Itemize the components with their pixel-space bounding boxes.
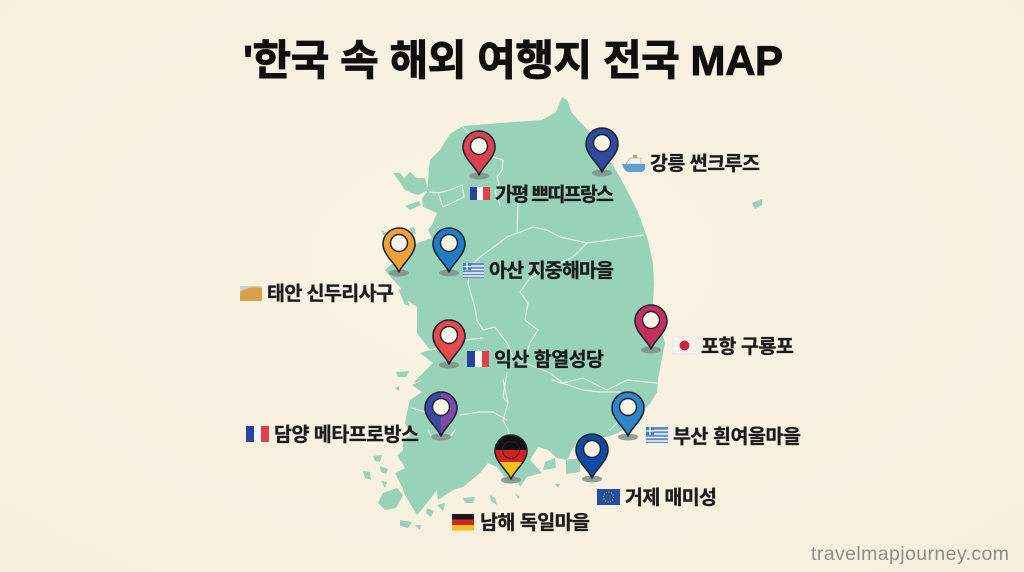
pin: Namhae [495,435,527,484]
pin: Pohang [635,305,667,354]
watermark: travelmapjourney.com [811,543,1009,565]
label: Gangneung: 강릉 썬크루즈 [650,153,760,175]
pin: Asan [433,228,465,276]
label: Taean: 태안 신두리사구 [267,283,394,305]
label: Busan: 부산 흰여울마을 [673,426,801,448]
pin: Gapyeong [463,131,495,180]
label: Namhae: 남해 독일마을 [480,512,590,534]
label: Iksan: 익산 함열성당 [494,349,604,371]
title: '한국 속 해외 여행지 전국 MAP [243,37,783,84]
pin: Taean [383,228,415,276]
label: Gapyeong: 가평 쁘띠프랑스 [495,184,614,206]
pin: Damyang [425,392,457,440]
pin: Geoje [576,434,608,482]
label: Damyang: 담양 메타프로방스 [274,424,419,446]
label: Pohang: 포항 구룡포 [701,336,794,358]
label: Asan: 아산 지중해마을 [489,260,614,282]
pin: Gangneung [586,128,618,176]
pin: Iksan [433,320,465,368]
label: Geoje: 거제 매미성 [625,487,717,509]
map of South Korea [363,97,762,530]
pin: Busan [612,392,644,440]
